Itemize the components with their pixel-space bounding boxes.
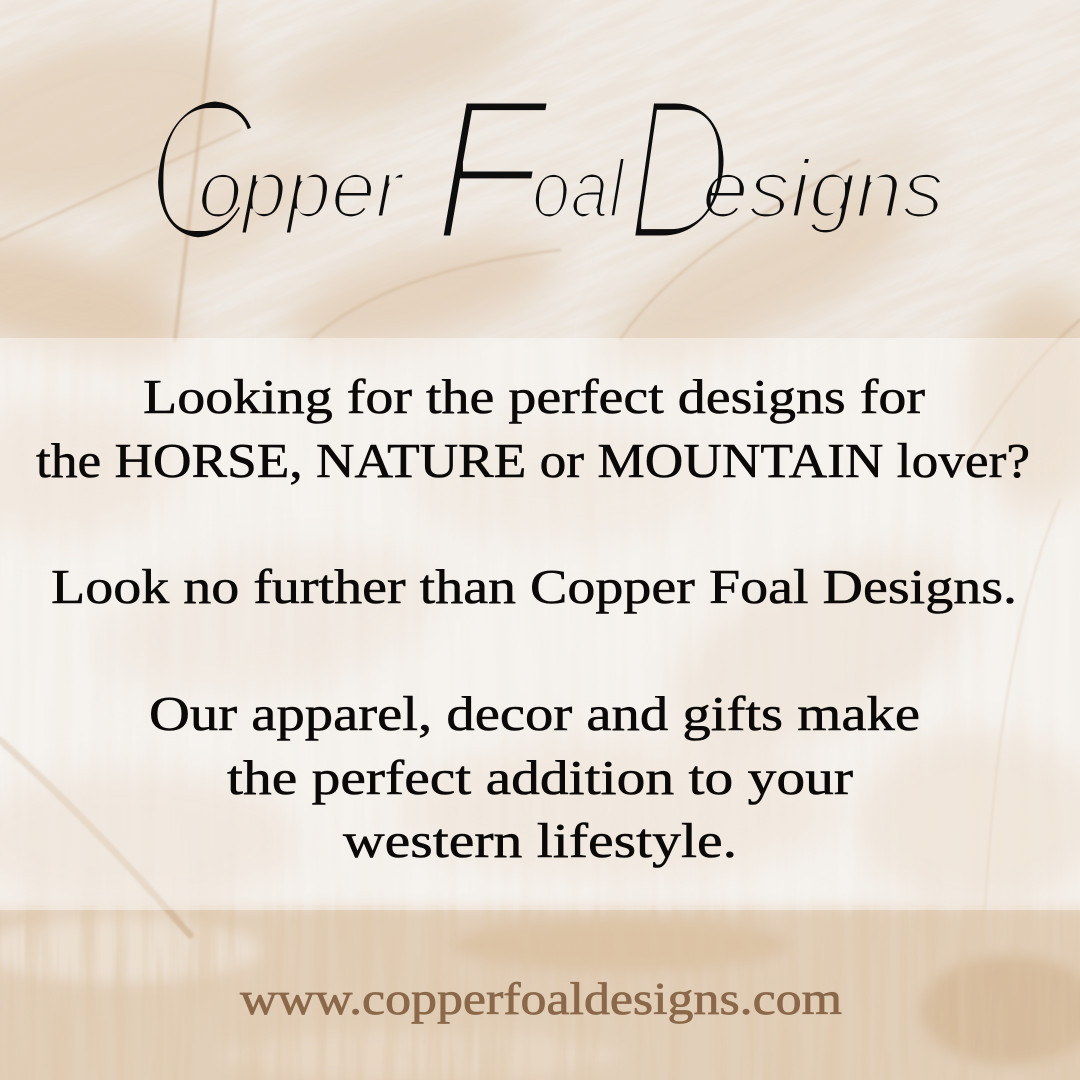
title: Copper Foal Designs: F — [432, 55, 553, 284]
title: Copper Foal Designs: opper — [198, 144, 406, 235]
title: Copper Foal Designs — [145, 55, 944, 284]
text block: products: the perfect addition to your — [227, 750, 853, 805]
text block: products — [149, 686, 920, 868]
text block: intro question: the HORSE, NATURE or MOUNTAIN lover? — [36, 433, 1030, 488]
translucent white text band — [0, 338, 1080, 910]
text block: products: Our apparel, decor and gifts make — [149, 686, 920, 741]
title: Copper Foal Designs: D — [625, 55, 733, 284]
text block: answer: Look no further than Copper Foal Designs. — [51, 559, 1017, 614]
website url: www.copperfoaldesigns.com — [240, 974, 842, 1024]
grass texture — [0, 0, 1080, 338]
title: Copper Foal Designs: oal — [532, 144, 626, 235]
title: Copper Foal Designs: C — [145, 55, 258, 284]
text block: intro question: Looking for the perfect designs for — [143, 369, 925, 424]
text block: intro question — [36, 369, 1030, 488]
title: Copper Foal Designs: esigns — [702, 144, 944, 235]
bottom grass mass — [0, 905, 1080, 1080]
text block: products: western lifestyle. — [343, 813, 737, 868]
